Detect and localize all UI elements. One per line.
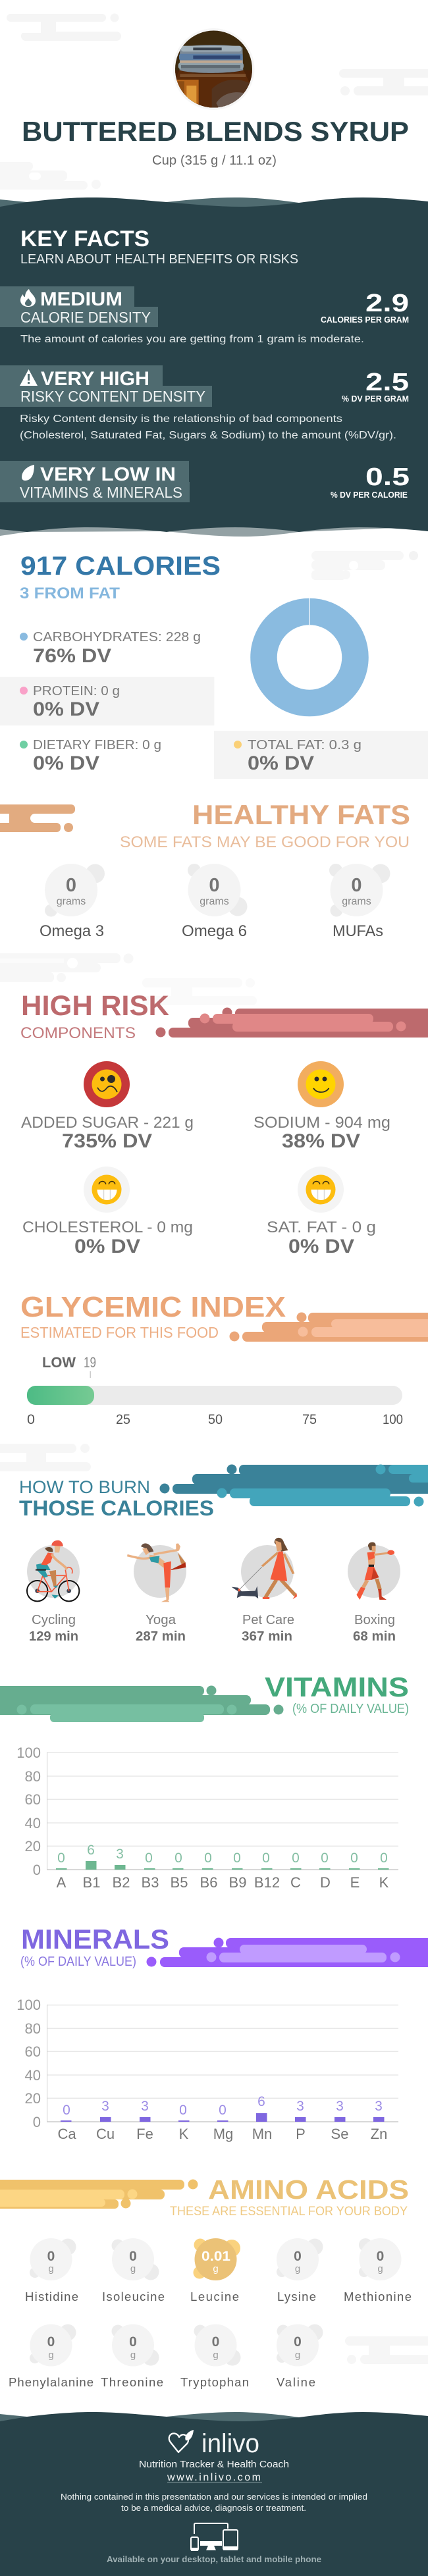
y axis labels: 0: [33, 2114, 41, 2130]
heading: HEALTHY FATS: [192, 799, 410, 830]
fat: omega 3: [40, 864, 105, 940]
x axis labels: B12: [254, 1874, 280, 1891]
y axis labels: 60: [25, 2043, 41, 2060]
activity: cycling: [27, 1540, 80, 1644]
heading line 1: HOW TO BURN: [19, 1477, 150, 1497]
amino: threonine: [101, 2324, 163, 2389]
fact: risky content density: (Cholesterol, Saturated Fat, Sugars & Sodium) to the amount (%DV/gr).: [20, 430, 396, 441]
x axis labels: Cu: [96, 2126, 115, 2142]
activity: cycling: 129 min: [29, 1629, 78, 1644]
background cloud centre: [142, 978, 257, 1005]
fat: mufas: [329, 864, 390, 940]
value labels: 3: [296, 2099, 304, 2114]
fact: vitamins and minerals: % DV PER CALORIE: [331, 490, 408, 500]
heading: MINERALS: [21, 1924, 169, 1955]
subheading: ESTIMATED FOR THIS FOOD: [20, 1324, 219, 1341]
risk: cholesterol: 0% DV: [74, 1236, 140, 1257]
icon: heart with leaf: [169, 2430, 194, 2452]
gauge scale: 75: [302, 1412, 317, 1427]
x axis labels: Mn: [252, 2126, 272, 2142]
amino: threonine: 0: [129, 2334, 137, 2350]
subheading: COMPONENTS: [20, 1024, 136, 1042]
fact: calorie density: CALORIE DENSITY: [20, 309, 151, 326]
value labels: 6: [87, 1843, 95, 1858]
y axis labels: 60: [25, 1791, 41, 1808]
x axis labels: B1: [83, 1874, 100, 1891]
risk: sodium: [254, 1061, 390, 1152]
x axis labels: B2: [113, 1874, 130, 1891]
value labels: 0: [292, 1851, 300, 1866]
amino: tryptophan: g: [213, 2350, 219, 2361]
gauge scale: 50: [208, 1412, 223, 1427]
activity: boxing: 68 min: [353, 1629, 396, 1644]
amino: isoleucine: [102, 2238, 165, 2303]
fact: risky content density: VERY HIGH: [41, 368, 149, 390]
wave highlight bottom: [0, 527, 428, 537]
amino: valine: 0: [294, 2334, 302, 2350]
value labels: 3: [336, 2099, 344, 2114]
x axis labels: A: [57, 1874, 67, 1891]
panel: high risk: [20, 990, 428, 1257]
logo: inlivo: [201, 2429, 259, 2458]
risk: saturated fat: [267, 1167, 376, 1257]
macro: total fat: [234, 738, 361, 774]
fact: calorie density: MEDIUM: [40, 289, 122, 310]
amino: leucine: [190, 2238, 240, 2303]
value labels: 0: [57, 1851, 65, 1866]
amino: histidine: g: [48, 2263, 54, 2274]
icon: devices: [191, 2523, 238, 2551]
x axis labels: P: [296, 2126, 306, 2142]
x axis labels: B3: [142, 1874, 159, 1891]
amino: lysine: Lysine: [277, 2290, 316, 2303]
header ribbon: [0, 1685, 283, 1722]
subheading: 3 FROM FAT: [20, 585, 120, 602]
icon: worried face: [84, 1061, 130, 1107]
row background: total fat: [214, 731, 428, 779]
bars: [56, 1861, 388, 1870]
panel: how to burn those calories: [19, 1464, 428, 1644]
bar chart: minerals: [16, 1997, 398, 2142]
macro: dietary fiber: 0% DV: [33, 752, 99, 774]
website: www.inlivo.com: [167, 2472, 261, 2483]
subheading: LEARN ABOUT HEALTH BENEFITS OR RISKS: [20, 252, 298, 267]
header ribbon: [0, 2179, 198, 2209]
value labels: 3: [101, 2099, 109, 2114]
fact: vitamins and minerals: [0, 461, 410, 502]
icon: woman walking dog: [232, 1538, 297, 1599]
amino: tryptophan: 0: [212, 2334, 219, 2350]
risk: added sugar: [21, 1061, 194, 1152]
amino: histidine: [25, 2238, 78, 2303]
x axis labels: K: [379, 1874, 389, 1891]
header ribbon: [155, 1007, 428, 1038]
gauge scale: [27, 1412, 403, 1427]
panel: footer: [0, 2412, 428, 2576]
serving size: Cup (315 g / 11.1 oz): [152, 153, 277, 168]
x axis labels: E: [350, 1874, 360, 1891]
macro: dietary fiber: [20, 738, 161, 774]
value labels: 3: [116, 1847, 124, 1862]
panel: minerals: [16, 1924, 428, 2142]
heading: HIGH RISK: [21, 990, 169, 1022]
macro: dietary fiber: DIETARY FIBER: 0 g: [33, 738, 161, 752]
y axis labels: 20: [25, 1838, 41, 1854]
y axis labels: [16, 1997, 41, 2130]
amino: threonine: Threonine: [101, 2375, 163, 2389]
gauge scale: 100: [383, 1412, 403, 1427]
fat: omega 6: grams: [200, 896, 229, 907]
icon: cyclist: [27, 1540, 80, 1601]
x axis labels: B5: [171, 1874, 188, 1891]
value labels: 0: [204, 1851, 212, 1866]
fat: mufas: MUFAs: [333, 922, 383, 940]
amino: methionine: [344, 2238, 412, 2303]
fat: mufas: grams: [342, 896, 371, 907]
x axis labels: D: [320, 1874, 331, 1891]
header ribbon: [229, 1313, 428, 1342]
risk: cholesterol: [22, 1167, 193, 1257]
activity: pet care: Pet Care: [242, 1613, 294, 1627]
donut chart: [263, 598, 356, 703]
y axis labels: 0: [33, 1862, 41, 1878]
x axis labels: Se: [331, 2126, 348, 2142]
risk: added sugar: 735% DV: [62, 1130, 152, 1152]
fact: calorie density: 2.9: [365, 290, 409, 317]
macro: carbohydrates: CARBOHYDRATES: 228 g: [33, 630, 201, 644]
activity: cycling: Cycling: [32, 1613, 76, 1627]
subheading: THESE ARE ESSENTIAL FOR YOUR BODY: [170, 2204, 408, 2219]
fact: risky content density: RISKY CONTENT DENSITY: [20, 388, 205, 405]
row background: protein: [0, 677, 215, 725]
y axis labels: [16, 1745, 41, 1878]
icon: flame: [20, 289, 36, 307]
macro: total fat: 0% DV: [248, 752, 314, 774]
gauge scale: 25: [116, 1412, 130, 1427]
availability note: Available on your desktop, tablet and mobile phone: [107, 2554, 321, 2564]
amino: phenylalanine: 0: [47, 2334, 55, 2350]
amino: lysine: g: [295, 2263, 300, 2274]
risk: saturated fat: SAT. FAT - 0 g: [267, 1219, 376, 1236]
panel: healthy fats: [0, 799, 410, 940]
value labels: 3: [375, 2099, 383, 2114]
risk: added sugar: ADDED SUGAR - 221 g: [21, 1114, 194, 1132]
macro: carbohydrates: 76% DV: [33, 645, 111, 667]
x axis labels: Ca: [57, 2126, 76, 2142]
value labels: 0: [174, 1851, 182, 1866]
activity: boxing: [348, 1542, 400, 1644]
subheading: (% OF DAILY VALUE): [292, 1702, 409, 1716]
amino: leucine: 0.01: [201, 2249, 230, 2264]
x axis labels: B9: [229, 1874, 246, 1891]
fact: calorie density: [0, 286, 409, 345]
risk: sodium: 38% DV: [282, 1130, 360, 1152]
fact: vitamins and minerals: 0.5: [365, 463, 410, 491]
activity: yoga: [127, 1543, 186, 1644]
fact: vitamins and minerals: VERY LOW IN: [40, 464, 176, 485]
logo: [169, 2429, 259, 2458]
fact: risky content density: [0, 365, 409, 441]
activity: pet care: [232, 1538, 297, 1644]
value labels: 0: [321, 1851, 329, 1866]
x axis labels: Fe: [136, 2126, 153, 2142]
background cloud top right: [339, 69, 428, 95]
x axis labels: C: [290, 1874, 301, 1891]
disclaimer: [61, 2492, 367, 2513]
y axis labels: 80: [25, 1768, 41, 1785]
icon: boxer: [348, 1542, 400, 1600]
header ribbon: [159, 1464, 428, 1506]
disclaimer: to be a medical advice, diagnosis or treatment.: [121, 2503, 306, 2513]
icon: leaf: [22, 465, 34, 481]
value labels: 0: [145, 1851, 153, 1866]
x axis labels: B6: [200, 1874, 217, 1891]
panel: key facts: [0, 197, 428, 537]
amino: histidine: 0: [47, 2249, 55, 2264]
icon: smiling face: [298, 1061, 344, 1107]
header ribbon: [146, 1938, 428, 1967]
macro: carbohydrates: [20, 630, 201, 667]
fact: risky content density: % DV PER GRAM: [342, 394, 409, 404]
value labels: 3: [141, 2099, 149, 2114]
wave highlight: [0, 2412, 299, 2423]
amino: lysine: 0: [294, 2249, 302, 2264]
value labels: 0: [262, 1851, 270, 1866]
fact: risky content density: 2.5: [365, 369, 409, 396]
fact: calorie density: The amount of calories you are getting from 1 gram is moderate.: [20, 334, 364, 345]
title: BUTTERED BLENDS SYRUP: [22, 116, 409, 147]
fat: omega 3: grams: [57, 896, 86, 907]
amino: phenylalanine: [9, 2324, 94, 2389]
y axis labels: 100: [16, 1745, 41, 1761]
amino: valine: [277, 2324, 323, 2389]
panel: vitamins: [0, 1671, 409, 1891]
value labels: [57, 1843, 388, 1866]
amino: isoleucine: Isoleucine: [102, 2290, 165, 2303]
amino: methionine: Methionine: [344, 2290, 412, 2303]
activity: boxing: Boxing: [354, 1613, 395, 1627]
y axis labels: 80: [25, 2020, 41, 2037]
value labels: [63, 2094, 383, 2118]
fat: omega 3: 0: [66, 875, 76, 896]
activity: pet care: 367 min: [242, 1629, 292, 1644]
value labels: 0: [219, 2103, 227, 2118]
fat: omega 6: 0: [209, 875, 220, 896]
dark background: [0, 2412, 428, 2576]
panel: glycemic index: [20, 1291, 428, 1427]
icon: grinning face: [298, 1167, 344, 1213]
value label: [42, 1354, 96, 1378]
background cloud left: [0, 1444, 91, 1471]
value labels: 0: [233, 1851, 241, 1866]
fact: calorie density: CALORIES PER GRAM: [321, 315, 409, 325]
amino: leucine: Leucine: [190, 2290, 239, 2303]
fat: omega 6: [182, 864, 248, 940]
amino: methionine: g: [377, 2263, 383, 2274]
value labels: 6: [257, 2094, 265, 2109]
macro: protein: PROTEIN: 0 g: [33, 684, 120, 698]
background cloud right: [345, 2336, 428, 2364]
x axis labels: Zn: [371, 2126, 387, 2142]
macro: protein: 0% DV: [33, 698, 99, 720]
header ribbon: [0, 804, 83, 832]
amino: lysine: [277, 2238, 323, 2303]
heading: AMINO ACIDS: [208, 2174, 409, 2205]
x axis labels: [57, 2126, 387, 2142]
amino: methionine: 0: [377, 2249, 384, 2264]
panel: calories: [0, 551, 428, 779]
x axis labels: K: [179, 2126, 189, 2142]
activity: yoga: 287 min: [136, 1629, 186, 1644]
fat: omega 3: Omega 3: [40, 922, 104, 940]
macro: total fat: TOTAL FAT: 0.3 g: [248, 738, 361, 752]
subheading: SOME FATS MAY BE GOOD FOR YOU: [120, 833, 410, 851]
gauge bar: [27, 1386, 402, 1405]
heading: KEY FACTS: [20, 226, 149, 251]
amino: phenylalanine: g: [48, 2350, 54, 2361]
value label: LOW: [42, 1354, 76, 1371]
y axis labels: 100: [16, 1997, 41, 2013]
value labels: 0: [380, 1851, 388, 1866]
value labels: 0: [63, 2103, 70, 2118]
macro: protein: [20, 684, 120, 720]
amino: tryptophan: Tryptophan: [180, 2375, 249, 2389]
wave highlight top: [0, 197, 299, 208]
gauge scale: 0: [27, 1412, 35, 1427]
icon: yoga pose: [127, 1543, 186, 1602]
fact: vitamins and minerals: VITAMINS & MINERALS: [20, 484, 182, 501]
activity: yoga: Yoga: [146, 1613, 176, 1627]
heading line 2: THOSE CALORIES: [19, 1496, 214, 1520]
bar chart: vitamins: [16, 1745, 398, 1891]
fat: mufas: 0: [351, 875, 362, 896]
food photo: syrup jar: [173, 28, 255, 111]
amino: isoleucine: 0: [129, 2249, 137, 2264]
fat: omega 6: Omega 6: [182, 922, 247, 940]
background cloud left: [0, 162, 101, 190]
background cloud: [311, 551, 418, 580]
amino: histidine: Histidine: [25, 2290, 78, 2303]
disclaimer: Nothing contained in this presentation and our services is intended or implied: [61, 2492, 367, 2502]
value label: 19: [84, 1354, 96, 1371]
y axis labels: 40: [25, 1815, 41, 1831]
amino: valine: Valine: [277, 2375, 315, 2389]
heading: GLYCEMIC INDEX: [20, 1291, 286, 1323]
panel: amino acids: [0, 2174, 428, 2389]
bars: [61, 2113, 385, 2122]
risk: saturated fat: 0% DV: [288, 1236, 354, 1257]
risk: sodium: SODIUM - 904 mg: [254, 1114, 390, 1132]
subheading: (% OF DAILY VALUE): [20, 1955, 136, 1969]
y axis labels: 40: [25, 2067, 41, 2084]
amino: leucine: g: [213, 2263, 219, 2274]
value labels: 0: [179, 2103, 187, 2118]
tagline: Nutrition Tracker & Health Coach: [139, 2459, 289, 2470]
dark background: [0, 197, 428, 532]
background cloud left: [0, 953, 133, 982]
y axis labels: 20: [25, 2090, 41, 2107]
amino: valine: g: [295, 2350, 300, 2361]
risk: cholesterol: CHOLESTEROL - 0 mg: [22, 1219, 193, 1236]
icon: warning triangle: [20, 369, 38, 386]
value labels: 0: [350, 1851, 358, 1866]
heading: 917 CALORIES: [20, 552, 221, 581]
background cloud top left: [7, 13, 121, 41]
icon: grinning face: [84, 1167, 130, 1213]
x axis labels: Mg: [213, 2126, 233, 2142]
amino: isoleucine: g: [130, 2263, 136, 2274]
x axis labels: [57, 1874, 389, 1891]
amino: threonine: g: [130, 2350, 136, 2361]
heading: VITAMINS: [265, 1671, 409, 1702]
amino: tryptophan: [180, 2324, 249, 2389]
amino: phenylalanine: Phenylalanine: [9, 2375, 94, 2389]
fact: risky content density: Risky Content density is the relationship of bad components: [20, 413, 342, 425]
